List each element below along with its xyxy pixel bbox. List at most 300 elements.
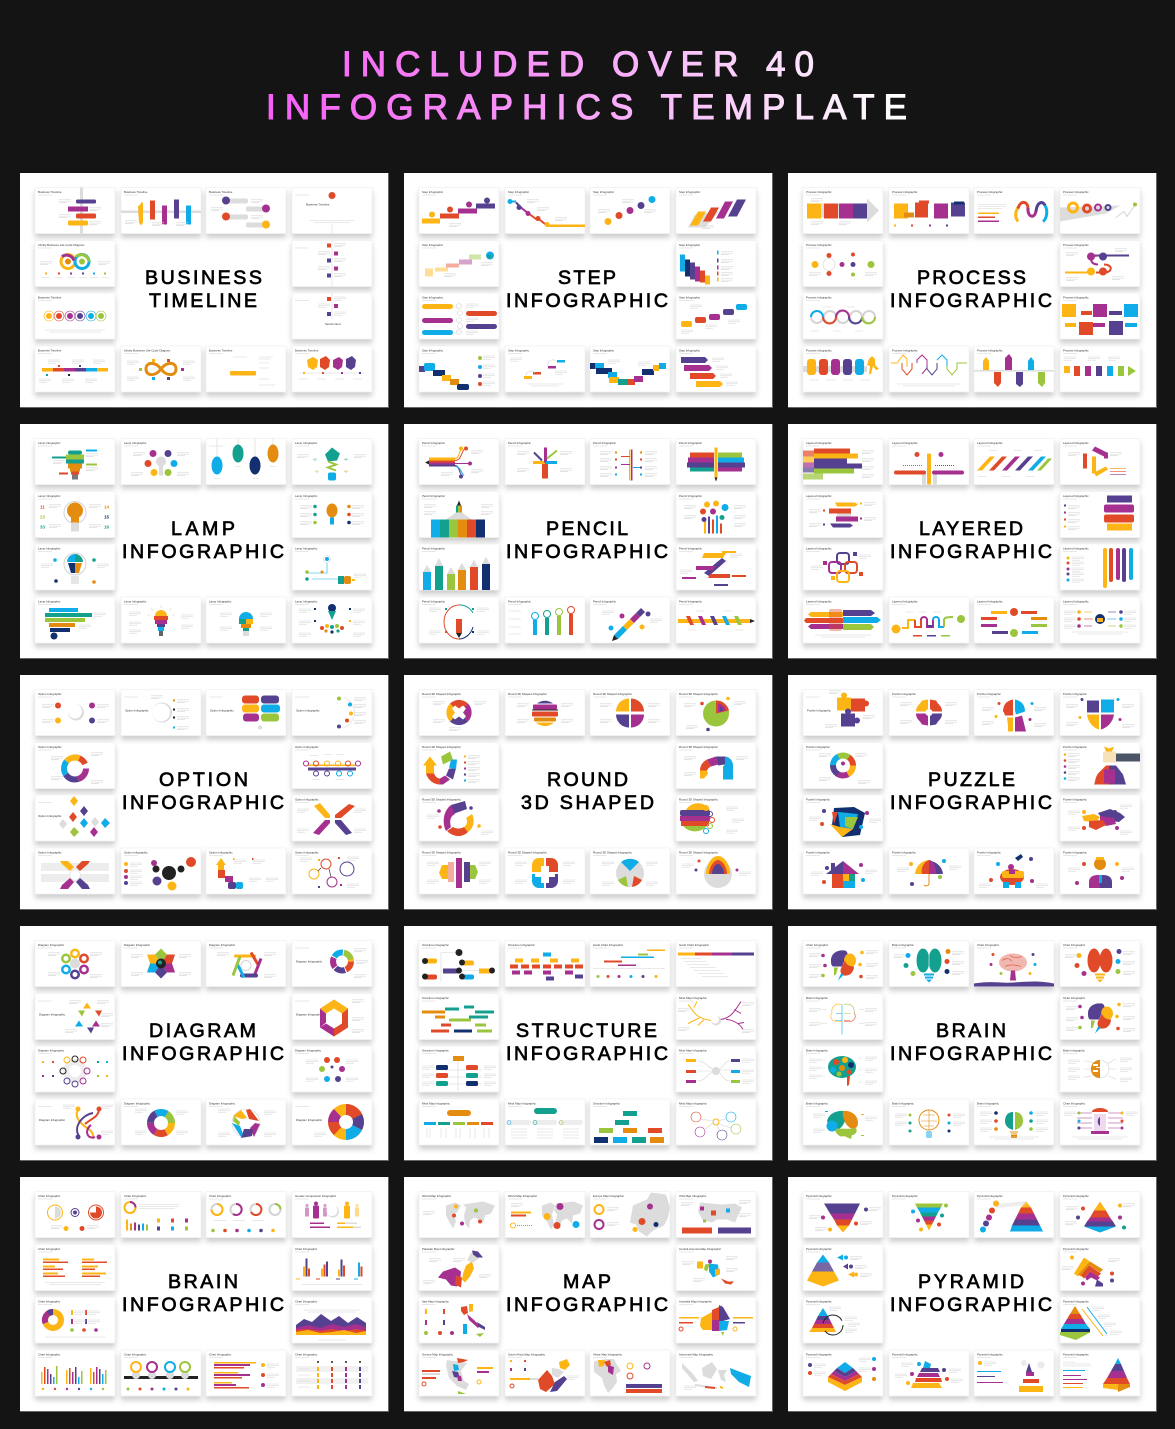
panel: process infographic [788, 173, 1156, 408]
thumbnail: red brain lamp [1060, 940, 1140, 986]
thumbnail: pyramid with ribbons: Pyramid Infographic [977, 1194, 1003, 1198]
thumbnail: branching tree pencil [505, 438, 585, 484]
thumbnail: lab brain jar [1060, 1099, 1140, 1145]
thumbnail: pins row: Business Timeline [295, 348, 319, 352]
thumbnail: pale arrows and globe [419, 240, 499, 286]
thumbnail: layered dome [676, 848, 756, 894]
heading: option infographic: INFOGRAPHIC [122, 792, 284, 814]
thumbnail: map header rows [505, 1099, 585, 1145]
thumbnail: ribbon bulb [292, 438, 372, 484]
thumbnail: bright bulb [206, 597, 286, 643]
thumbnail: hex rows [206, 188, 286, 234]
thumbnail: area chart [292, 1297, 372, 1343]
heading: brain infographic [890, 1020, 1052, 1065]
thumbnail: pencil stage [419, 492, 499, 538]
thumbnail: Indonesia map [676, 1350, 756, 1396]
thumbnail: ring top pencils: Pencil Infographic [508, 600, 532, 604]
thumbnail: brain bulb numbers: 11 [40, 504, 45, 510]
panel: pyramid infographic [788, 1177, 1156, 1412]
thumbnail: neuron mind map: Mind Map Infographic [679, 996, 707, 1000]
heading: map infographic [506, 1271, 668, 1316]
thumbnail: bulb and dots: Lamp Infographic [295, 600, 318, 604]
thumbnail: staircase: Step Infographic [422, 190, 444, 194]
heading: brain infographic: INFOGRAPHIC [122, 1294, 284, 1316]
thumbnail: Greece map [419, 1350, 499, 1396]
thumbnail: colour region brain [803, 1099, 883, 1145]
thumbnail: pencil in ring: Pencil Infographic [422, 600, 446, 604]
thumbnail: linked squares: Process Infographic [892, 190, 918, 194]
heading: pyramid infographic [890, 1271, 1052, 1316]
thumbnail: ribbon bulb: 45° [344, 470, 348, 474]
thumbnail: stopwatch gauges [35, 1192, 115, 1238]
thumbnail: outline mind map [676, 1099, 756, 1145]
panel: layered infographic [788, 424, 1156, 658]
heading: option infographic [122, 769, 284, 814]
thumbnail: dark cluster: Option Infographic [124, 850, 148, 854]
thumbnail: diagonal layers [974, 438, 1054, 484]
thumbnail: Australia map: Australia Map Infographic [679, 1300, 712, 1304]
thumbnail: pencil wings [676, 438, 756, 484]
thumbnail: brain bulb numbers: 14 [104, 504, 110, 510]
heading: round 3D shaped: ROUND [547, 769, 628, 791]
thumbnail: bulb and plug: Lamp Infographic [295, 546, 318, 550]
heading: brain infographic: BRAIN [168, 1271, 238, 1293]
thumbnail: wave ribbon rings: Process Infographic [806, 296, 832, 300]
thumbnail: woven rings [803, 544, 883, 590]
thumbnail: outlined brain [803, 994, 883, 1040]
thumbnail: Africa map: Africa Map Infographic [593, 1352, 622, 1356]
thumbnail: Italy map: Italy Map Infographic [422, 1300, 449, 1304]
heading: diagram infographic: DIAGRAM [149, 1020, 256, 1042]
thumbnail: vertical squares [292, 240, 372, 286]
thumbnail: pencil branches: Pencil Infographic [422, 441, 446, 445]
thumbnail: arrow tags: Step Infographic [679, 348, 701, 352]
thumbnail: piggy bank: Puzzle Infographic [977, 850, 1001, 854]
thumbnail: runner process [803, 346, 883, 392]
thumbnail: column row to arrow: Process Infographic [1063, 348, 1089, 352]
heading: business timeline [145, 267, 262, 312]
thumbnail: Z ribbon pencil [676, 544, 756, 590]
thumbnail: half bulb [292, 492, 372, 538]
thumbnail: mosaic brain: Brain Infographic [806, 1048, 828, 1052]
thumbnail: tee pillars: Layered Infographic [892, 441, 918, 445]
thumbnail: brain bulb numbers: Lamp Infographic [38, 494, 61, 498]
thumbnail: pinwheel [206, 1099, 286, 1145]
thumbnail: ring chain with arrow [1060, 188, 1140, 234]
thumbnail: gender comparison: Gender Comparison Infographic [295, 1194, 337, 1198]
thumbnail: multi bar groups: Chart Infographic [38, 1352, 61, 1356]
thumbnail: wrapped pillars [1060, 544, 1140, 590]
thumbnail: chevron band [35, 346, 115, 392]
thumbnail: money bag [1060, 742, 1140, 788]
thumbnail: petal bulb: Lamp Infographic [124, 441, 147, 445]
thumbnail: node cycle: Process Infographic [806, 243, 832, 247]
thumbnail: parallelogram stairs [676, 188, 756, 234]
thumbnail: quartered sphere [590, 690, 670, 736]
thumbnail: pencil blossoms: Pencil Infographic [679, 494, 703, 498]
thumbnail: triangular ribbon [1060, 438, 1140, 484]
thumbnail: dual bar chart: Chart Infographic [38, 1247, 61, 1251]
heading: diagram infographic: INFOGRAPHIC [122, 1043, 284, 1065]
thumbnail: puzzle hub: Diagram Infographic [295, 1048, 322, 1052]
thumbnail: wave ribbon rings [803, 293, 883, 339]
thumbnail: triangles [35, 994, 115, 1040]
thumbnail: side brain repeat [1060, 994, 1140, 1040]
thumbnail: pyramid org chart: Structure Infographic [593, 1102, 620, 1106]
thumbnail: hub mind map: Mind Map Infographic [679, 1048, 707, 1052]
thumbnail: rounded bars [419, 293, 499, 339]
thumbnail: hex rows: Business Timeline [209, 190, 233, 194]
thumbnail: outline bulb: Lamp Infographic [38, 546, 61, 550]
thumbnail: striped bulb [35, 438, 115, 484]
thumbnail: woven rings: Layered Infographic [806, 546, 832, 550]
thumbnail: star globe [121, 940, 201, 986]
panel: chart infographic titled brain [20, 1177, 388, 1412]
thumbnail: ring row [35, 293, 115, 339]
thumbnail: inverted pyramid dark: Pyramid Infographic [806, 1194, 832, 1198]
thumbnail: mixed org chart [419, 994, 499, 1040]
thumbnail: pinwheel: Diagram Infographic [209, 1102, 236, 1106]
thumbnail: vertical fan: Round 3D Shaped Infographic [422, 850, 461, 854]
thumbnail: ring row with bar [292, 742, 372, 788]
thumbnail: USA map [676, 1192, 756, 1238]
thumbnail: brain bulb numbers: 16 [104, 524, 110, 530]
heading: brain infographic [122, 1271, 284, 1316]
thumbnail: org tree dark circles [419, 940, 499, 986]
heading: structure infographic: STRUCTURE [516, 1020, 657, 1042]
thumbnail: star ring: Option Infographic [38, 745, 62, 749]
thumbnail: donut and bars: Chart Infographic [124, 1194, 147, 1198]
thumbnail: mixed org chart: Structure Infographic [422, 996, 449, 1000]
thumbnail: process arrow [803, 188, 883, 234]
thumbnail: head puzzle [974, 690, 1054, 736]
thumbnail: pencil branches [419, 438, 499, 484]
thumbnail: small vertical bar groups: Chart Infographic [295, 1247, 318, 1251]
thumbnail: colour wheel: Diagram Infographic [124, 1102, 151, 1106]
panel: diagram infographic [20, 926, 388, 1160]
thumbnail: money bag: Puzzle Infographic [1063, 745, 1087, 749]
thumbnail: brain bulb numbers: 15 [104, 514, 110, 520]
thumbnail: lab brain jar: Chart Infographic [1063, 1102, 1086, 1106]
thumbnail: people table: Chart Infographic [295, 1352, 318, 1356]
thumbnail: Australia map [676, 1297, 756, 1343]
thumbnail: snake wave [974, 188, 1054, 234]
thumbnail: rising hexagons: Step Infographic [593, 190, 615, 194]
heading: diagram infographic [122, 1020, 284, 1065]
thumbnail: central disc with options: Option Infographic [38, 692, 62, 696]
thumbnail: pencil with side lists: Pencil Infographic [593, 441, 617, 445]
thumbnail: mountain pyramid [974, 1350, 1054, 1396]
thumbnail: 3D columns: Step Infographic [679, 243, 701, 247]
heading: business timeline: TIMELINE [149, 290, 257, 312]
thumbnail: circular arrows [419, 795, 499, 841]
thumbnail: jigsaw pieces [803, 690, 883, 736]
thumbnail: small vertical bar groups [292, 1244, 372, 1290]
thumbnail: inverted pyramid dark [803, 1192, 883, 1238]
thumbnail: piggy bank [974, 848, 1054, 894]
thumbnail: South Africa map: South Africa Map Infographic [508, 1352, 546, 1356]
thumbnail: gear puzzle: Puzzle Infographic [892, 692, 916, 696]
thumbnail: big disc: Option Infographic [125, 708, 149, 712]
panel: option infographic [20, 675, 388, 910]
panel: brain infographic [788, 926, 1156, 1160]
thumbnail: side brain: Chart Infographic [806, 943, 829, 947]
thumbnail: column row to arrow [1060, 346, 1140, 392]
thumbnail: rising hexagons [590, 188, 670, 234]
thumbnail: inverted pyramid colours: Pyramid Infographic [892, 1194, 918, 1198]
thumbnail: Pakistan map [419, 1244, 499, 1290]
thumbnail: layered bars bulb: Lamp Infographic [38, 600, 61, 604]
panel: round 3D shaped [404, 675, 772, 910]
thumbnail: pale arrows and globe: Step Infographic [422, 243, 444, 247]
thumbnail: horizontal pencil twist [676, 597, 756, 643]
thumbnail: striped sphere: Round 3D Shaped Infographic [508, 692, 547, 696]
thumbnail: vertical arrows [121, 188, 201, 234]
thumbnail: diamond cross [35, 795, 115, 841]
thumbnail: diagonal step path [505, 188, 585, 234]
thumbnail: vertical arrow tabs: Process Infographic [977, 348, 1003, 352]
heading: layered infographic: LAYERED [919, 518, 1023, 540]
thumbnail: people table [292, 1350, 372, 1396]
thumbnail: infinity cycle: Infinity Business Life-Cycle Diagram [38, 243, 85, 247]
thumbnail: gantt table: Gantt Chart Infographic [679, 943, 710, 947]
thumbnail: descending ribbon: Step Infographic [422, 348, 444, 352]
heading: lamp infographic: INFOGRAPHIC [122, 541, 284, 563]
thumbnail: ring with nodes [292, 690, 372, 736]
thumbnail: vertical arrows: Business Timeline [124, 190, 148, 194]
thumbnail: brain bulb numbers: 23 [40, 514, 46, 520]
thumbnail: U shaped ribbon: Step Infographic [593, 348, 615, 352]
thumbnail: star globe: Diagram Infographic [124, 943, 151, 947]
thumbnail: rounded bars: Step Infographic [422, 296, 444, 300]
thumbnail: layered dome: Round 3D Shaped Infographic [679, 850, 718, 854]
thumbnail: colour wheel [121, 1099, 201, 1145]
thumbnail: puzzle hub [292, 1046, 372, 1092]
thumbnail: europe map: Europe Map Infographic [593, 1194, 624, 1198]
thumbnail: diamond cross: Option Infographic [38, 814, 62, 818]
heading: map infographic: INFOGRAPHIC [506, 1294, 668, 1316]
thumbnail: striped sphere [505, 690, 585, 736]
thumbnail: half arch: Round 3D Shaped Infographic [679, 745, 718, 749]
heading: map infographic: MAP [563, 1271, 611, 1293]
thumbnail: section end [292, 293, 372, 339]
thumbnail: big disc [121, 690, 201, 736]
panel: map infographic [404, 1177, 772, 1412]
panel: business timeline [20, 173, 388, 408]
thumbnail: area chart: Chart Infographic [295, 1300, 318, 1304]
thumbnail: layered tabs: Layered Infographic [806, 441, 832, 445]
thumbnail: curved arrow segments: Option Infographic [209, 850, 233, 854]
thumbnail: house puzzle: Puzzle Infographic [806, 850, 830, 854]
heading: process infographic [890, 267, 1052, 312]
thumbnail: puzzle cube: Puzzle Infographic [806, 798, 830, 802]
thumbnail: ribbon sphere [676, 795, 756, 841]
thumbnail: butterfly tabs: Option Infographic [295, 798, 319, 802]
thumbnail: vertical arrow tabs [974, 346, 1054, 392]
thumbnail: sphere cutaway: Round 3D Shaped Infographic [679, 692, 718, 696]
thumbnail: floating tiers: Pyramid Infographic [892, 1352, 918, 1356]
thumbnail: sphere cutaway [676, 690, 756, 736]
thumbnail: outlined brain: Brain Infographic [806, 996, 828, 1000]
thumbnail: floating tiers [889, 1350, 969, 1396]
thumbnail: layered bars bulb [35, 597, 115, 643]
thumbnail: ring row: Business Timeline [38, 296, 62, 300]
thumbnail: jigsaw pieces: Puzzle Infographic [807, 708, 831, 712]
thumbnail: pins row [292, 346, 372, 392]
thumbnail: head puzzle: Puzzle Infographic [977, 692, 1001, 696]
thumbnail: brain tree: Chart Infographic [977, 943, 1000, 947]
thumbnail: Z ribbon pencil: Pencil Infographic [679, 546, 703, 550]
thumbnail: ring gauges [206, 1192, 286, 1238]
thumbnail: hex bars [206, 940, 286, 986]
thumbnail: side pyramid: Pyramid Infographic [1063, 1247, 1089, 1251]
thumbnail: europe map [590, 1192, 670, 1238]
thumbnail: twin tracks: Process Infographic [1063, 243, 1089, 247]
thumbnail: world map one: World Map Infographic [422, 1194, 452, 1198]
thumbnail: interlaced loops: Diagram Infographic [39, 1118, 66, 1122]
thumbnail: cross sphere [419, 690, 499, 736]
thumbnail: mosaic brain [803, 1046, 883, 1092]
thumbnail: multi bar groups [35, 1350, 115, 1396]
thumbnail: gender comparison [292, 1192, 372, 1238]
heading: pencil infographic [506, 518, 668, 563]
thumbnail: hub mind map [676, 1046, 756, 1092]
thumbnail: chevron band: Business Timeline [38, 348, 62, 352]
thumbnail: arched steps [505, 346, 585, 392]
thumbnail: horizontal bars legend [206, 1350, 286, 1396]
thumbnail: gear segment ring [292, 940, 372, 986]
thumbnail: descending ribbon [419, 346, 499, 392]
thumbnail: teal brain lamp [889, 940, 969, 986]
thumbnail: puzzle ring [803, 742, 883, 788]
thumbnail: wide stacked pyramid: Pyramid Infographic [1063, 1300, 1089, 1304]
thumbnail: wrapped pillars: Layered Infographic [1063, 546, 1089, 550]
thumbnail: interlaced loops [35, 1099, 115, 1145]
thumbnail: 3D columns [676, 240, 756, 286]
title [266, 45, 907, 127]
thumbnail: parallelogram stairs: Step Infographic [679, 190, 701, 194]
thumbnail: donut and bars [121, 1192, 201, 1238]
thumbnail: ring top pencils [505, 597, 585, 643]
thumbnail: large donut: Diagram Infographic [296, 1118, 323, 1122]
thumbnail: single diagonal pencil [590, 597, 670, 643]
thumbnail: dual bar chart [35, 1244, 115, 1290]
panel: structure infographic [404, 926, 772, 1160]
thumbnail: chain circle: Diagram Infographic [38, 1048, 65, 1052]
thumbnail: rectangular loop [974, 597, 1054, 643]
thumbnail: rounded plus [505, 848, 585, 894]
thumbnail: house puzzle [803, 848, 883, 894]
thumbnail: curved arrow: Round 3D Shaped Infographic [422, 745, 461, 749]
thumbnail: pyramid with list [1060, 1350, 1140, 1396]
thumbnail: horizontal pencil twist: Pencil Infographic [679, 600, 703, 604]
thumbnail: tall org chart [419, 1046, 499, 1092]
heading: structure infographic: INFOGRAPHIC [506, 1043, 668, 1065]
thumbnail: central disc with options [35, 690, 115, 736]
thumbnail: gear segment ring: Diagram Infographic [296, 960, 323, 964]
thumbnail: umbrella puzzle: Puzzle Infographic [892, 850, 916, 854]
thumbnail: dark cluster [121, 848, 201, 894]
thumbnail: S-layers: Layered Infographic [806, 494, 832, 498]
thumbnail: petal bulb [121, 438, 201, 484]
thumbnail: block org chart [505, 940, 585, 986]
thumbnail: timeline intro: Business Timeline [306, 202, 330, 206]
thumbnail: shield puzzle [1060, 690, 1140, 736]
heading: layered infographic: INFOGRAPHIC [890, 541, 1052, 563]
thumbnail: infinity cycle [35, 240, 115, 286]
thumbnail: staggered tags: Business Timeline [38, 190, 62, 194]
thumbnail: pyramid with ring: Pyramid Infographic [806, 1300, 832, 1304]
thumbnail: Central America map: Central America Map Infographic [679, 1247, 722, 1251]
thumbnail: twin tracks [1060, 240, 1140, 286]
thumbnail: hexagon [292, 994, 372, 1040]
thumbnail: stopwatch gauges: Chart Infographic [38, 1194, 61, 1198]
thumbnail: side brain [803, 940, 883, 986]
thumbnail: rounded plus: Round 3D Shaped Infographic [508, 850, 547, 854]
thumbnail: 3D pyramid [1060, 1192, 1140, 1238]
thumbnail: speech blocks [206, 690, 286, 736]
thumbnail: hex bars: Diagram Infographic [209, 943, 236, 947]
thumbnail: large donut [292, 1099, 372, 1145]
heading: pencil infographic: PENCIL [546, 518, 628, 540]
thumbnail: South Africa map [505, 1350, 585, 1396]
thumbnail: brain bulb outline: Brain Infographic [892, 1102, 914, 1106]
thumbnail: lobes brain: Brain Infographic [1063, 1048, 1085, 1052]
thumbnail: ribbon bulb: 43° [315, 470, 319, 474]
thumbnail: gantt chart: Gantt Chart Infographic [593, 943, 624, 947]
thumbnail: inverted pyramid colours [889, 1192, 969, 1238]
thumbnail: serpentine path [889, 597, 969, 643]
thumbnail: outline bulb [35, 544, 115, 590]
heading: brain infographic: INFOGRAPHIC [890, 1043, 1052, 1065]
thumbnail: flat puzzle map: Puzzle Infographic [1063, 798, 1087, 802]
thumbnail: hub X [35, 848, 115, 894]
thumbnail: world map two: World Map Infographic [508, 1194, 538, 1198]
thumbnail: diagonal layers: Layered Infographic [977, 441, 1003, 445]
thumbnail: rectangular loop: Layered Infographic [977, 600, 1003, 604]
thumbnail: umbrella puzzle [889, 848, 969, 894]
thumbnail: half bulb: Lamp Infographic [295, 494, 318, 498]
thumbnail: outline mind map: Mind Map Infographic [679, 1102, 707, 1106]
thumbnail: flat puzzle map [1060, 795, 1140, 841]
thumbnail: 3D pyramid: Pyramid Infographic [1063, 1194, 1089, 1198]
thumbnail: brain bulb numbers [35, 492, 115, 538]
thumbnail: isometric stacked: Pyramid Infographic [806, 1352, 832, 1356]
thumbnail: red brain lamp: Chart Infographic [1063, 943, 1086, 947]
thumbnail: hexagon: Diagram Infographic [296, 1012, 323, 1016]
thumbnail: snake wave: Process Infographic [977, 190, 1003, 194]
thumbnail: globe segments: Round 3D Shaped Infographic [593, 850, 632, 854]
thumbnail: half arch [676, 742, 756, 788]
thumbnail: gear puzzle [889, 690, 969, 736]
heading: business timeline: BUSINESS [145, 267, 262, 289]
thumbnail: arched steps: Step Infographic [508, 348, 530, 352]
thumbnail: ring gauges: Chart Infographic [209, 1194, 232, 1198]
thumbnail: curved arrow segments [206, 848, 286, 894]
thumbnail: world map two [505, 1192, 585, 1238]
thumbnail: pencil stage: Pencil Infographic [422, 494, 446, 498]
thumbnail: pencil in ring [419, 597, 499, 643]
thumbnail: process arrow: Process Infographic [806, 190, 832, 194]
thumbnail: U shaped ribbon [590, 346, 670, 392]
thumbnail: arrow chain: Step Infographic [679, 296, 701, 300]
title: INFOGRAPHICS TEMPLATE [266, 88, 907, 127]
thumbnail: double-sided arrows [803, 597, 883, 643]
thumbnail: teal green bulb brain: Brain Infographic [977, 1102, 999, 1106]
thumbnail: staircase [419, 188, 499, 234]
thumbnail: colour blocks: Process Infographic [1063, 296, 1089, 300]
thumbnail: teal brain lamp: Brain Infographic [892, 943, 914, 947]
